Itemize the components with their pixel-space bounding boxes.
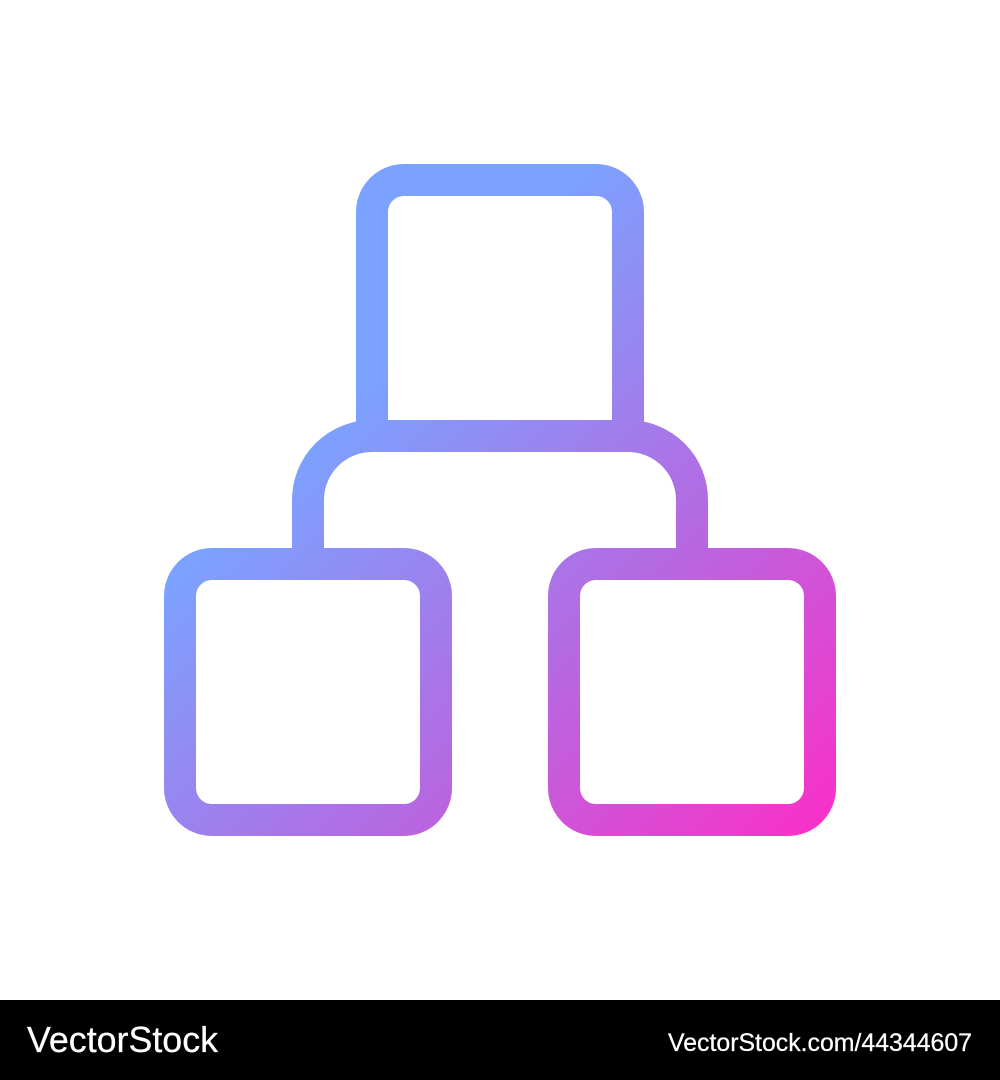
bottom left square node bbox=[180, 564, 436, 820]
top square node bbox=[372, 180, 628, 436]
connector between nodes bbox=[308, 436, 692, 564]
footer logo text: VectorStock bbox=[27, 1019, 219, 1060]
footer image id text: VectorStock.com/44344607 bbox=[668, 1029, 972, 1057]
bottom right square node bbox=[564, 564, 820, 820]
footer bar bbox=[0, 1000, 1000, 1080]
icon: hierarchy diagram bbox=[180, 180, 820, 820]
